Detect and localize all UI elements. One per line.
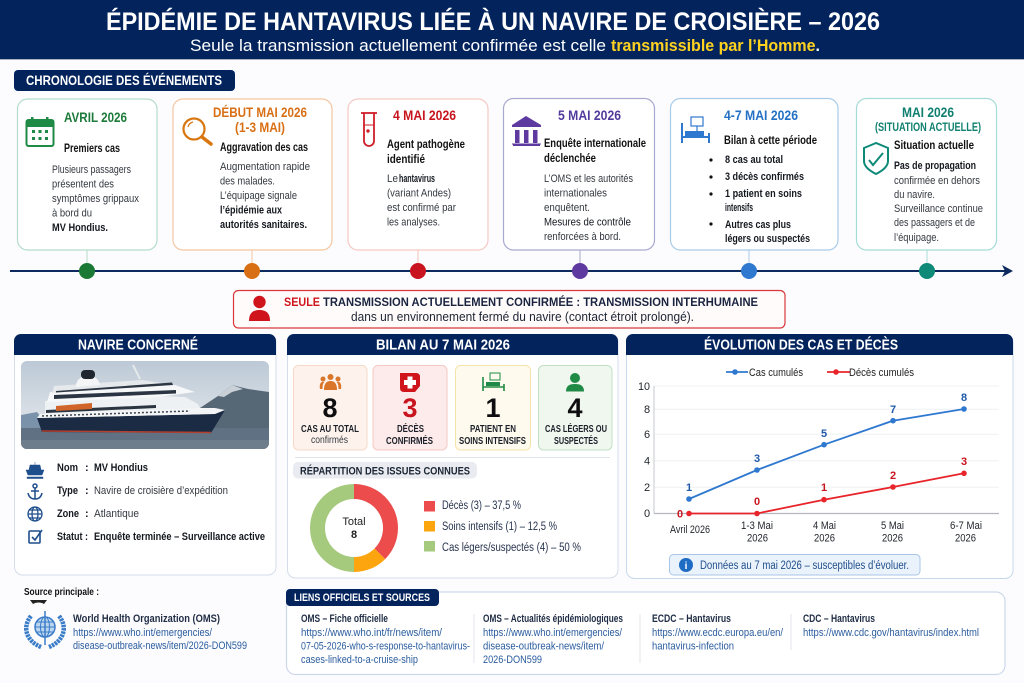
series: deces cumules bbox=[677, 456, 967, 520]
card body bbox=[387, 173, 456, 228]
section heading: chronologie: CHRONOLOGIE DES ÉVÉNEMENTS bbox=[26, 73, 222, 88]
donut chart bbox=[310, 484, 398, 572]
x axis labels bbox=[670, 520, 982, 544]
card body: des malades. bbox=[220, 176, 275, 188]
icon: bed bbox=[483, 373, 504, 391]
date: 4-7 MAI 2026 bbox=[724, 107, 798, 123]
date: 5 MAI 2026 bbox=[558, 107, 621, 123]
card body: (variant Andes) bbox=[387, 188, 451, 200]
date: MAI 2026 bbox=[902, 104, 954, 120]
stat: deces: 3 bbox=[402, 393, 418, 423]
link: oms actualites: 2026-DON599 bbox=[483, 654, 542, 666]
info row: zone: : bbox=[85, 508, 89, 520]
icon: test tube bbox=[361, 113, 377, 146]
donut chart: 8 bbox=[351, 529, 357, 541]
link: oms fiche: cases-linked-to-a-cruise-ship bbox=[301, 654, 418, 666]
card body bbox=[220, 161, 310, 231]
source label: Source principale : bbox=[24, 586, 99, 598]
card body: autorités sanitaires. bbox=[220, 219, 307, 231]
callout headline: TRANSMISSION ACTUELLEMENT CONFIRMÉE : TRANSMISSION INTERHUMAINE bbox=[323, 294, 758, 309]
bullet list bbox=[709, 154, 810, 245]
link: ecdc: hantavirus-infection bbox=[652, 640, 734, 652]
subtitle highlight: transmissible par l’Homme. bbox=[611, 36, 820, 55]
card body: l’équipage. bbox=[894, 232, 939, 244]
card body: Plusieurs passagers bbox=[52, 164, 131, 176]
donut legend: Cas légers/suspectés (4) – 50 % bbox=[442, 542, 581, 554]
info row: type bbox=[28, 484, 228, 499]
note: data caveat bbox=[670, 554, 920, 575]
card body: des passagers et de bbox=[894, 217, 975, 229]
y axis labels bbox=[638, 381, 650, 520]
decorative mark under source label bbox=[30, 600, 47, 604]
upper decks bbox=[47, 385, 195, 402]
panel: evolution bbox=[626, 334, 1013, 578]
series: cas cumules: 8 bbox=[961, 392, 967, 404]
chart legend bbox=[726, 367, 914, 379]
y axis labels: 6 bbox=[644, 429, 650, 441]
series: deces cumules: 1 bbox=[821, 482, 827, 494]
date: AVRIL 2026 bbox=[64, 109, 127, 125]
stat: cas au total: CAS AU TOTAL bbox=[301, 424, 359, 435]
icon: institution bbox=[512, 116, 541, 146]
link: ecdc bbox=[652, 613, 783, 652]
card: 5 mai 2026 bbox=[504, 98, 654, 250]
card: situation actuelle bbox=[856, 98, 996, 250]
note: data caveat: Données au 7 mai 2026 – susceptibles d’évoluer. bbox=[700, 560, 909, 572]
chart legend: Décès cumulés bbox=[849, 367, 914, 379]
card heading: Enquête internationale bbox=[544, 138, 646, 150]
card: 4-7 mai 2026 bbox=[670, 98, 838, 250]
icon: calendar bbox=[26, 117, 54, 146]
panel heading: BILAN AU 7 MAI 2026 bbox=[376, 338, 510, 354]
icon: hospital bed bbox=[682, 117, 709, 143]
x axis labels: 6-7 Mai bbox=[950, 520, 982, 532]
y axis labels: 4 bbox=[644, 456, 650, 468]
y axis labels: 8 bbox=[644, 404, 650, 416]
card body: les analyses. bbox=[387, 216, 440, 228]
x axis labels: 2026 bbox=[747, 532, 768, 544]
series: cas cumules: 7 bbox=[890, 404, 896, 416]
panel: bilan bbox=[287, 334, 618, 578]
lower decks bbox=[37, 408, 225, 418]
info row: type: Navire de croisière d’expédition bbox=[94, 485, 228, 497]
link: ecdc: ECDC – Hantavirus bbox=[652, 613, 731, 625]
info row: type: : bbox=[85, 485, 89, 497]
card body: L’OMS et les autorités bbox=[544, 173, 634, 185]
card heading: Situation actuelle bbox=[894, 140, 974, 152]
card body: renforcées à bord. bbox=[544, 231, 621, 243]
header banner bbox=[0, 0, 1024, 60]
line chart bbox=[638, 367, 999, 544]
card: debut mai 2026 bbox=[173, 99, 332, 250]
icon: checklist bbox=[29, 530, 42, 543]
donut chart: Total bbox=[342, 516, 366, 528]
stat: deces: DÉCÈS bbox=[397, 422, 424, 435]
callout: transmission bbox=[234, 290, 785, 328]
source principale bbox=[24, 586, 247, 652]
bullet list: Autres cas plus bbox=[725, 219, 791, 231]
donut legend: Décès (3) – 37,5 % bbox=[442, 500, 521, 512]
title: ÉPIDÉMIE DE HANTAVIRUS LIÉE À UN NAVIRE DE CROISIÈRE – 2026 bbox=[106, 7, 880, 36]
icon: medical cross bbox=[400, 373, 420, 392]
series: cas cumules: 3 bbox=[754, 453, 760, 465]
card heading: Agent pathogène bbox=[387, 139, 465, 151]
x axis labels: 4 Mai bbox=[813, 520, 836, 532]
card body: symptômes grippaux bbox=[52, 193, 140, 205]
series: deces cumules: 3 bbox=[961, 456, 967, 468]
subheading: repartition bbox=[293, 462, 477, 478]
bullet list: 3 décès confirmés bbox=[725, 171, 804, 183]
icon: globe bbox=[28, 507, 42, 521]
card body: Augmentation rapide bbox=[220, 161, 310, 173]
y axis labels: 0 bbox=[644, 508, 650, 520]
card heading: Bilan à cette période bbox=[724, 135, 817, 147]
date qualifier: (SITUATION ACTUELLE) bbox=[875, 120, 981, 134]
stat: soins intensifs: PATIENT EN bbox=[470, 424, 516, 435]
card body: Surveillance continue bbox=[894, 203, 983, 215]
link: oms actualites: https://www.who.int/emergencies/ bbox=[483, 627, 622, 639]
stat: cas au total: 8 bbox=[322, 393, 338, 423]
link: ecdc: https://www.ecdc.europa.eu/en/ bbox=[652, 627, 783, 639]
series: cas cumules: 1 bbox=[686, 482, 692, 494]
info row: nom bbox=[26, 462, 148, 478]
panel: liens officiels bbox=[286, 589, 1005, 674]
callout label: SEULE bbox=[284, 295, 320, 309]
timeline axis bbox=[10, 250, 1013, 279]
panel heading: LIENS OFFICIELS ET SOURCES bbox=[294, 592, 430, 604]
stat: deces: CONFIRMÉS bbox=[386, 434, 433, 447]
subtitle: Seule la transmission actuellement confirmée est celle bbox=[190, 36, 606, 55]
info row: zone bbox=[28, 507, 139, 521]
x axis labels: 5 Mai bbox=[881, 520, 904, 532]
card body: confirmée en dehors bbox=[894, 175, 981, 187]
callout detail: dans un environnement fermé du navire (contact étroit prolongé). bbox=[351, 310, 694, 324]
x axis labels: 2026 bbox=[955, 532, 976, 544]
panel heading: NAVIRE CONCERNÉ bbox=[78, 336, 198, 354]
card body: hantavirus bbox=[399, 173, 435, 185]
date: 4 MAI 2026 bbox=[393, 107, 456, 123]
link: cdc: https://www.cdc.gov/hantavirus/index.html bbox=[803, 627, 979, 639]
source name: World Health Organization (OMS) bbox=[73, 613, 220, 625]
x axis labels: 1-3 Mai bbox=[741, 520, 773, 532]
panel: navire concerne bbox=[14, 334, 276, 575]
bullet list: 1 patient en soins bbox=[725, 188, 802, 200]
stat: cas legers: SUSPECTÉS bbox=[554, 434, 598, 447]
icon: person bbox=[566, 373, 584, 392]
x axis labels: Avril 2026 bbox=[670, 524, 710, 536]
subheading: repartition: RÉPARTITION DES ISSUES CONNUES bbox=[300, 464, 470, 478]
info row: zone: Zone bbox=[57, 508, 79, 520]
stat: soins intensifs bbox=[456, 366, 530, 450]
info row: statut: Statut : bbox=[57, 531, 88, 543]
link: oms actualites: disease-outbreak-news/item/ bbox=[483, 640, 604, 652]
card heading: Premiers cas bbox=[64, 143, 120, 155]
card body: L’équipage signale bbox=[220, 190, 297, 202]
bullet list: intensifs bbox=[725, 202, 753, 214]
link: oms fiche: 07-05-2026-who-s-response-to-hantavirus- bbox=[301, 640, 470, 652]
card heading line 2: déclenchée bbox=[544, 153, 596, 165]
date: DÉBUT MAI 2026 bbox=[213, 104, 307, 120]
card body bbox=[894, 160, 983, 244]
hull bbox=[37, 410, 225, 433]
info row: type: Type bbox=[57, 485, 78, 497]
card body bbox=[544, 173, 634, 243]
stat: cas legers: CAS LÉGERS OU bbox=[545, 422, 607, 435]
donut legend bbox=[424, 500, 581, 554]
stat: soins intensifs: 1 bbox=[485, 393, 501, 423]
card body: est confirmé par bbox=[387, 202, 456, 214]
info row: nom: Nom bbox=[57, 462, 78, 474]
icon: ship bbox=[26, 462, 44, 478]
card body: l’épidémie aux bbox=[220, 204, 282, 216]
series: deces cumules: 0 bbox=[677, 508, 683, 520]
panel heading: ÉVOLUTION DES CAS ET DÉCÈS bbox=[704, 336, 898, 354]
stat: cas au total: confirmés bbox=[311, 435, 348, 446]
card body: Pas de propagation bbox=[894, 160, 976, 172]
card body: MV Hondius. bbox=[52, 222, 108, 234]
info row: nom: : bbox=[85, 462, 89, 474]
series: deces cumules: 2 bbox=[890, 470, 896, 482]
panel heading bbox=[286, 589, 439, 606]
icon: person bbox=[249, 296, 270, 321]
y axis labels: 10 bbox=[638, 381, 650, 393]
bullet list: 8 cas au total bbox=[725, 154, 783, 166]
source link: disease-outbreak-news/item/2026-DON599 bbox=[73, 640, 247, 652]
source link bbox=[73, 627, 247, 652]
link: oms actualites: OMS – Actualités épidémiologiques bbox=[483, 613, 623, 625]
card body: présentent des bbox=[52, 178, 115, 190]
card: avril 2026 bbox=[18, 99, 157, 250]
info row: statut bbox=[29, 530, 265, 543]
note: data caveat: i bbox=[685, 561, 688, 572]
card body: enquêtent. bbox=[544, 202, 590, 214]
info row: zone: Atlantique bbox=[94, 508, 139, 520]
info row: statut: Enquête terminée – Surveillance active bbox=[94, 531, 265, 543]
card heading: Aggravation des cas bbox=[220, 142, 308, 154]
icon: who emblem bbox=[26, 611, 64, 647]
stat: cas legers bbox=[538, 366, 612, 450]
donut legend: Soins intensifs (1) – 12,5 % bbox=[442, 521, 557, 533]
series: cas cumules bbox=[686, 392, 967, 502]
card body: Le bbox=[387, 173, 398, 185]
card: 4 mai 2026 bbox=[348, 99, 488, 250]
card heading line 2: identifié bbox=[387, 154, 425, 166]
stat: cas legers: 4 bbox=[567, 393, 583, 423]
card body bbox=[52, 164, 140, 234]
series: cas cumules: 5 bbox=[821, 428, 827, 440]
info row: nom: MV Hondius bbox=[94, 462, 148, 474]
series: deces cumules: 0 bbox=[754, 496, 760, 508]
link: oms fiche: https://www.who.int/fr/news/item/ bbox=[301, 627, 442, 639]
card body: du navire. bbox=[894, 189, 935, 201]
icon: group bbox=[320, 374, 341, 390]
card body: Mesures de contrôle bbox=[544, 216, 631, 228]
link: oms fiche bbox=[301, 613, 470, 666]
stat: cas au total bbox=[294, 366, 367, 450]
card body: internationales bbox=[544, 188, 608, 200]
card body: à bord du bbox=[52, 208, 92, 220]
link: oms actualites bbox=[483, 613, 623, 666]
source link: https://www.who.int/emergencies/ bbox=[73, 627, 212, 639]
icon: shield bbox=[864, 143, 888, 174]
chart legend: Cas cumulés bbox=[749, 367, 803, 379]
ship photo bbox=[21, 361, 269, 449]
x axis labels: 2026 bbox=[882, 532, 903, 544]
link: oms fiche: OMS – Fiche officielle bbox=[301, 613, 388, 625]
date range: (1-3 MAI) bbox=[235, 119, 285, 135]
link: cdc bbox=[803, 613, 979, 639]
y axis labels: 2 bbox=[644, 482, 650, 494]
section heading: chronologie bbox=[14, 70, 235, 91]
stat: soins intensifs: SOINS INTENSIFS bbox=[459, 436, 526, 447]
bullet list: légers ou suspectés bbox=[725, 233, 810, 245]
x axis labels: 2026 bbox=[814, 532, 835, 544]
icon: anchor bbox=[28, 484, 42, 499]
icon: magnifier bbox=[184, 118, 211, 144]
link: cdc: CDC – Hantavirus bbox=[803, 613, 875, 625]
stat: deces bbox=[373, 366, 447, 450]
